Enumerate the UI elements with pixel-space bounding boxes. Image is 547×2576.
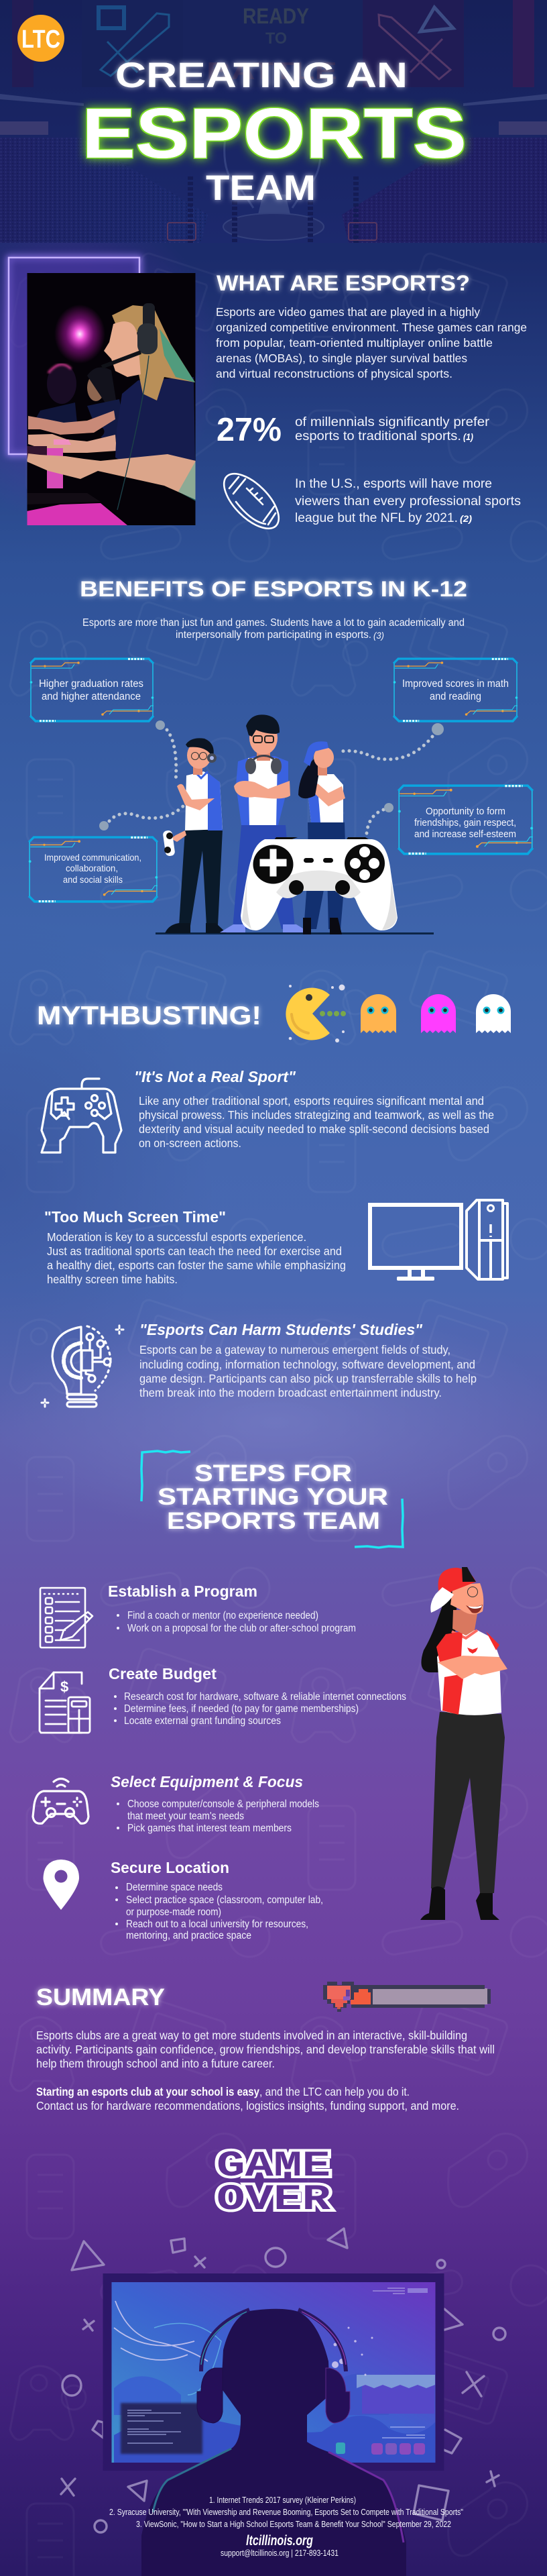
step: secure location xyxy=(43,1859,323,1941)
step: select equipment: Select Equipment & Focus xyxy=(111,1773,303,1790)
summary text: activity. Participants gain confidence, grow friendships, and develop transferable skills that will xyxy=(36,2043,495,2056)
footnotes: 2. Syracuse University, "'With Viewership and Revenue Booming, Esports Set to Compete with Traditional Sports" xyxy=(109,2508,463,2517)
title xyxy=(82,56,467,208)
intro text xyxy=(82,617,465,641)
description: organized competitive environment. These games can range xyxy=(216,321,527,334)
illustration: gamer silhouette at monitor xyxy=(61,2229,505,2576)
myth: too much screen time xyxy=(44,1208,346,1286)
heading: MYTHBUSTING! xyxy=(37,1002,261,1030)
myth: too much screen time: "Too Much Screen Time" xyxy=(44,1208,226,1226)
stat: 27% of millennials: 27% xyxy=(217,412,282,448)
step: secure location: Reach out to a local university for resources, xyxy=(126,1919,308,1930)
footnotes xyxy=(109,2496,463,2529)
heading: BENEFITS OF ESPORTS IN K-12 xyxy=(80,577,467,601)
icon: budget sheet with calculator: $ xyxy=(60,1678,68,1695)
neon frame xyxy=(9,258,139,454)
illustration: three gamers with controller xyxy=(156,714,434,934)
right gamer xyxy=(298,741,346,934)
icon: football xyxy=(215,465,288,537)
step: secure location: Secure Location xyxy=(111,1859,229,1876)
panel: summary xyxy=(36,1982,495,2220)
title: ESPORTS xyxy=(82,94,467,173)
hero banner: esports arena: BATTLE xyxy=(206,57,337,85)
step: establish a program: Find a coach or mentor (no experience needed) xyxy=(127,1610,318,1621)
myth: not a real sport: on on-screen actions. xyxy=(139,1136,241,1150)
callout: communication: and social skills xyxy=(63,874,123,885)
callout: scores: and reading xyxy=(430,691,481,702)
intro text: (3) xyxy=(373,630,384,641)
summary text: help them through school and into a future career. xyxy=(36,2057,275,2070)
hero banner: esports arena: READY xyxy=(243,4,309,28)
myth: harm studies: Esports can be a gateway to numerous emergent fields of study, xyxy=(139,1343,450,1356)
monitor xyxy=(103,2273,444,2471)
myth: not a real sport: physical prowess. This includes strategizing and teamwork, as well as the xyxy=(139,1108,494,1122)
ghost: orange xyxy=(361,994,396,1033)
heading with bracket: ESPORTS TEAM xyxy=(167,1508,380,1534)
callout: communication xyxy=(29,837,158,902)
heading with bracket: STEPS FOR xyxy=(194,1460,352,1487)
floating controller shapes xyxy=(61,2229,505,2532)
game over xyxy=(217,2146,331,2220)
step: establish a program: Work on a proposal for the club or after-school program xyxy=(127,1623,356,1634)
icon: budget sheet with calculator xyxy=(40,1672,90,1733)
icon: desktop computer xyxy=(370,1200,507,1281)
icon: lightbulb with gear and circuits xyxy=(42,1326,123,1407)
LTC logo: LTC xyxy=(21,25,60,54)
callout: scores: Improved scores in math xyxy=(402,678,509,690)
summary text: Starting an esports club at your school is easy xyxy=(36,2085,259,2098)
myth: not a real sport: dexterity and visual acuity needed to make split-second decisions based xyxy=(139,1122,489,1136)
stat: viewers: viewers than every professional sports xyxy=(295,494,521,508)
myth: too much screen time: a healthy diet, esports can foster the same while emphasizing xyxy=(47,1258,346,1272)
myth: too much screen time: Just as traditional sports can teach the need for exercise and xyxy=(47,1244,342,1258)
description: from popular, team-oriented multiplayer online battle xyxy=(216,336,493,350)
step: select equipment: Choose computer/console & peripheral models xyxy=(127,1799,319,1810)
stat: 27% of millennials: esports to traditional sports. xyxy=(295,429,461,443)
summary text: Contact us for hardware recommendations, logistics insights, funding support, and more. xyxy=(36,2099,459,2112)
callout: graduation: and higher attendance xyxy=(42,691,141,702)
step: secure location: or purpose-made room) xyxy=(126,1907,221,1918)
callout: communication: collaboration, xyxy=(66,863,118,873)
step: secure location: Determine space needs xyxy=(126,1882,223,1893)
hero banner: esports arena: TO xyxy=(265,30,287,48)
myth: harm studies: including coding, information technology, software development, and xyxy=(139,1358,475,1371)
myth: too much screen time: Moderation is key to a successful esports experience. xyxy=(47,1230,306,1244)
big controller xyxy=(241,837,398,930)
middle gamer xyxy=(220,714,310,932)
icon: pac-man and ghosts xyxy=(286,985,511,1042)
callout: graduation: Higher graduation rates xyxy=(39,678,143,690)
health bar xyxy=(323,1982,491,2012)
step: create budget: Locate external grant funding sources xyxy=(124,1715,281,1727)
description: Esports are video games that are played in a highly xyxy=(216,305,480,319)
contact info: support@ltcillinois.org | 217-893-1431 xyxy=(221,2548,339,2558)
step: secure location: mentoring, and practice space xyxy=(126,1930,251,1941)
step: select equipment xyxy=(33,1773,319,1834)
footnotes: 1. Internet Trends 2017 survey (Kleiner Perkins) xyxy=(209,2496,356,2505)
panel: benefits of esports xyxy=(29,577,533,934)
footnotes: 3. ViewSonic, "How to Start a High School Esports Team & Benefit Your School" September 29, 2022 xyxy=(136,2520,451,2529)
icon: checklist xyxy=(40,1588,93,1648)
heading: SUMMARY xyxy=(36,1984,165,2010)
myth: too much screen time: healthy screen time habits. xyxy=(47,1273,178,1286)
ghost: white xyxy=(476,994,511,1033)
stat: 27% of millennials: (1) xyxy=(463,431,473,442)
stat: 27% of millennials: of millennials significantly prefer xyxy=(295,415,490,429)
summary text xyxy=(36,2029,495,2112)
step: create budget: Research cost for hardware, software & reliable internet connections xyxy=(124,1691,406,1703)
stat: 27% of millennials xyxy=(217,412,490,448)
icon: wireless gamepad xyxy=(33,1779,88,1823)
step: secure location: Select practice space (classroom, computer lab, xyxy=(126,1894,323,1906)
step: create budget: Create Budget xyxy=(109,1665,217,1682)
heading with bracket xyxy=(141,1451,403,1548)
step: establish a program: Establish a Program xyxy=(108,1582,257,1600)
myth: harm studies: "Esports Can Harm Students' Studies" xyxy=(139,1321,423,1338)
panel: what are esports xyxy=(9,258,527,537)
stat: viewers: league but the NFL by 2021. xyxy=(295,511,458,525)
title: CREATING AN xyxy=(115,56,408,95)
description: arenas (MOBAs), to single player survival battles xyxy=(216,352,467,365)
stat: viewers: In the U.S., esports will have more xyxy=(295,477,492,491)
intro text: Esports are more than just fun and games. Students have a lot to gain academically and xyxy=(82,617,465,629)
intro text: interpersonally from participating in esports. xyxy=(176,629,371,641)
myth: harm studies xyxy=(139,1321,477,1399)
callout: scores xyxy=(393,659,518,721)
step: select equipment: that meet your team's needs xyxy=(127,1811,244,1822)
illustration: woman in red cap xyxy=(420,1567,507,1920)
stat: viewers xyxy=(295,477,521,525)
description: and virtual reconstructions of physical sports. xyxy=(216,367,452,380)
callout: friendships xyxy=(398,786,533,854)
myth: not a real sport xyxy=(134,1068,494,1150)
callout: friendships: Opportunity to form xyxy=(426,806,505,817)
LTC logo xyxy=(17,15,64,62)
myth: not a real sport: Like any other traditional sport, esports requires significant mental and xyxy=(139,1094,484,1108)
game over: GAME xyxy=(217,2146,330,2187)
left gamer xyxy=(162,738,227,933)
callout: graduation xyxy=(30,659,154,721)
summary text: Esports clubs are a great way to get more students involved in an interactive, skill-building xyxy=(36,2029,467,2042)
connector: dotted lines xyxy=(99,720,444,833)
contact info xyxy=(221,2533,339,2558)
step: establish a program xyxy=(40,1582,356,1648)
callout: friendships: and increase self-esteem xyxy=(414,829,516,840)
icon: hands holding controller xyxy=(42,1079,121,1152)
heading with bracket: STARTING YOUR xyxy=(158,1484,388,1510)
stat: viewers: (2) xyxy=(460,513,472,524)
ghost: magenta xyxy=(421,994,456,1033)
panel: steps for starting your esports team xyxy=(33,1451,507,1941)
callout: friendships: friendships, gain respect, xyxy=(414,818,516,828)
game over: OVER xyxy=(217,2180,331,2220)
callout: communication: Improved communication, xyxy=(44,852,141,863)
step: create budget: Determine fees, if needed (to pay for game memberships) xyxy=(124,1703,359,1715)
title: TEAM xyxy=(206,168,316,208)
description xyxy=(216,305,527,380)
step: select equipment: Pick games that interest team members xyxy=(127,1823,292,1834)
hero banner: esports arena xyxy=(0,0,547,243)
myth: harm studies: them break into the modern broadcast entertainment industry. xyxy=(139,1386,442,1399)
silhouette xyxy=(141,2309,406,2576)
summary text: , and the LTC can help you do it. xyxy=(259,2085,410,2098)
photo: student gamer with headset xyxy=(27,273,196,525)
myth: harm studies: game design. Participants can also pick up transferrable skills to help xyxy=(139,1372,477,1385)
myth: not a real sport: "It's Not a Real Sport" xyxy=(134,1068,296,1085)
contact info: ltcillinois.org xyxy=(246,2533,313,2548)
icon: map pin xyxy=(43,1860,79,1910)
step: create budget xyxy=(40,1665,406,1733)
panel: mythbusting xyxy=(37,985,511,1407)
heading: WHAT ARE ESPORTS? xyxy=(217,271,470,295)
